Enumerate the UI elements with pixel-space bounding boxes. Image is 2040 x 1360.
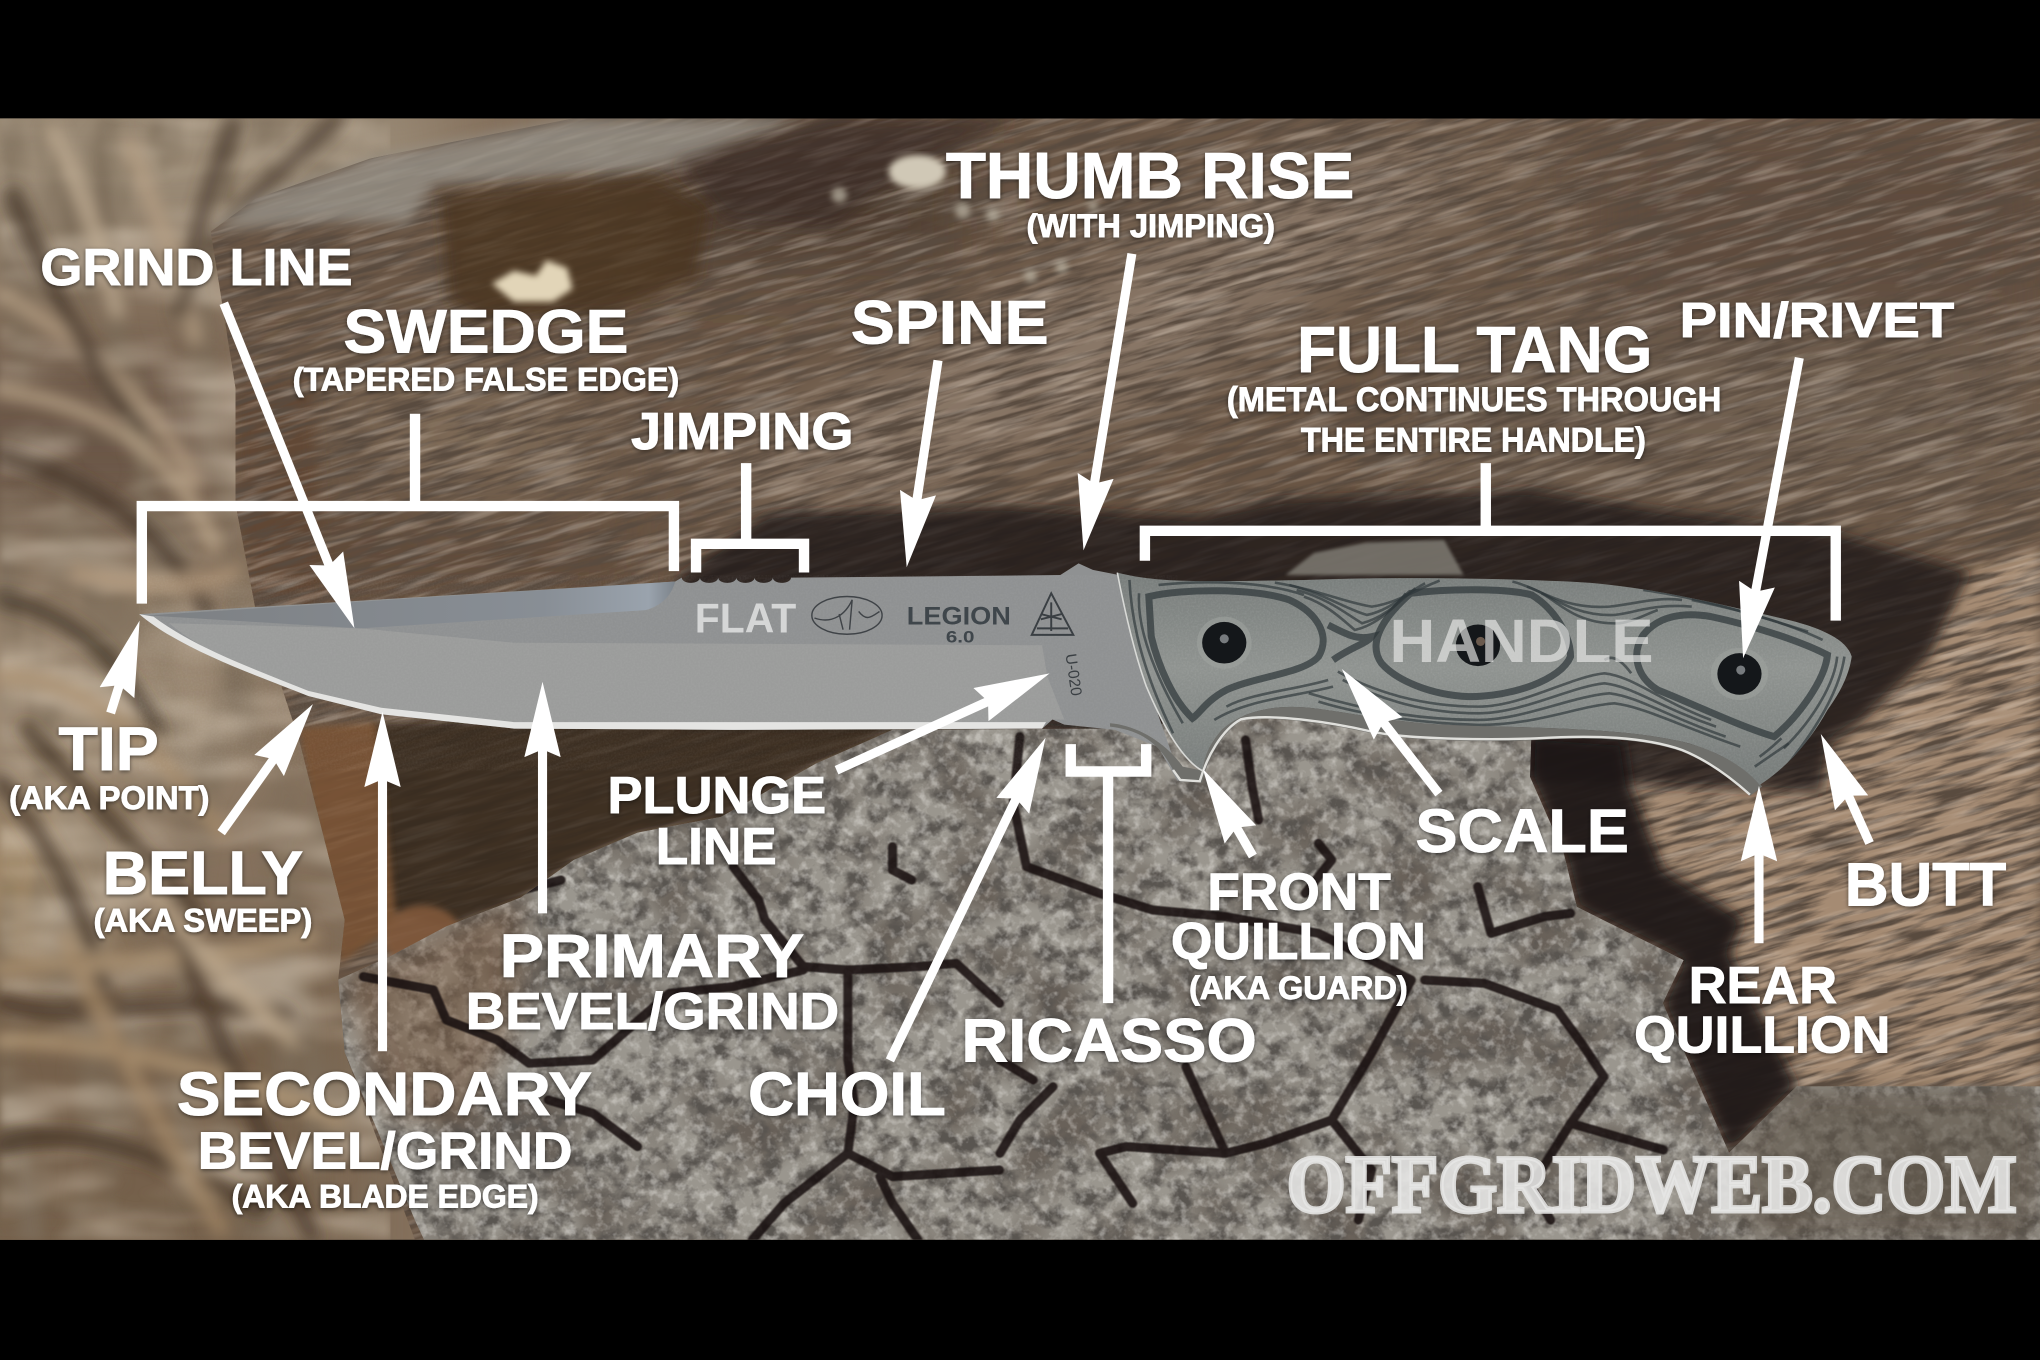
- knife: [139, 563, 1860, 800]
- logo: signature circle: [812, 597, 882, 634]
- label: ricasso: RICASSO: [961, 1007, 1257, 1075]
- label: swedge: [293, 298, 679, 397]
- blade and tang body: [139, 563, 1202, 782]
- wood base tone: [195, 118, 2040, 1240]
- arrow: rear quillion: [1755, 833, 1762, 943]
- brown tint at bark left: [338, 898, 520, 1119]
- label: choil: CHOIL: [748, 1060, 946, 1128]
- bracket: ricasso: [1071, 744, 1146, 1003]
- label: rear quillion: [1634, 957, 1890, 1065]
- knife cast shadow: [677, 490, 1968, 794]
- labels: [9, 139, 2006, 1214]
- straw dark noise: [0, 118, 390, 1240]
- bark light texture: [325, 709, 2040, 1240]
- arrow: belly: [221, 742, 286, 833]
- liner highlight: [1173, 717, 1750, 795]
- bracket: swedge: [142, 414, 674, 604]
- liner band: [1110, 707, 1762, 796]
- text: LEGION model: LEGION: [907, 603, 1011, 630]
- arrow: tip: [111, 665, 126, 713]
- label: full tang: FULL TANG: [1297, 313, 1652, 386]
- label: rear quillion: REAR: [1689, 957, 1837, 1015]
- handle micarta texture: [1112, 566, 1860, 800]
- bark dark texture: [325, 709, 2040, 1240]
- straw strands: [0, 117, 338, 1236]
- bark strip at log top: [211, 118, 807, 232]
- blurred wood colour fields: [247, 130, 2040, 585]
- label: secondary bevel: SECONDARY: [177, 1060, 592, 1128]
- bracket: jimping: [696, 463, 804, 572]
- rivet front: [1197, 617, 1252, 669]
- text: serial number: U-020: [1062, 653, 1084, 697]
- primary bevel: [169, 623, 1064, 726]
- label: front quillion: FRONT: [1207, 863, 1391, 921]
- straw light noise: [0, 118, 390, 1240]
- label: butt: BUTT: [1845, 851, 2006, 919]
- dark wood under blade: [371, 722, 911, 926]
- tan wood lower right: [1624, 546, 2040, 1086]
- label: plunge line: LINE: [656, 818, 777, 876]
- label: plunge line: PLUNGE: [608, 767, 826, 825]
- rust strip at front of log: [299, 722, 397, 963]
- label: swedge: (TAPERED FALSE EDGE): [293, 361, 679, 397]
- blurred dark bark at lower right: [1729, 1086, 2040, 1240]
- label: primary bevel: [466, 922, 839, 1041]
- arrow: choil: [890, 780, 1025, 1060]
- bark base tone: [325, 709, 2040, 1240]
- blurred straw colour fields: [0, 78, 442, 1288]
- wood log: [195, 118, 2040, 1240]
- text: FLAT etching: FLAT: [695, 594, 796, 641]
- arrow: front quillion: [1226, 810, 1253, 856]
- label: jimping: JIMPING: [631, 403, 853, 461]
- scale front edge highlight: [1117, 573, 1202, 771]
- arrow: butt: [1840, 777, 1870, 843]
- rivet centre: [1456, 624, 1500, 666]
- label: primary bevel: BEVEL/GRIND: [466, 983, 839, 1041]
- light streak texture: [195, 118, 2040, 1240]
- label: thumb rise: [946, 139, 1354, 244]
- label: pin/rivet: PIN/RIVET: [1680, 293, 1954, 348]
- label: thumb rise: (WITH JIMPING): [1027, 208, 1275, 244]
- label: belly: BELLY: [103, 839, 303, 907]
- label: secondary bevel: (AKA BLADE EDGE): [232, 1178, 539, 1214]
- label: secondary bevel: [177, 1060, 592, 1214]
- text: HANDLE overlay: HANDLE: [1389, 607, 1654, 675]
- label: front quillion: QUILLION: [1171, 913, 1426, 971]
- blade fine grain: [139, 575, 1177, 770]
- pale wood chip: [492, 260, 572, 302]
- bark large tone variation: [325, 709, 2040, 1240]
- pale wood chip top: [889, 155, 946, 189]
- bark lumps behind handle: [1285, 540, 1464, 575]
- arrow: thumb rise: [1091, 254, 1132, 504]
- label: thumb rise: THUMB RISE: [946, 139, 1354, 212]
- label: full tang: (METAL CONTINUES THROUGH: [1227, 381, 1721, 419]
- orange lump: [384, 906, 462, 968]
- label: grind line: GRIND LINE: [40, 239, 353, 297]
- label: secondary bevel: BEVEL/GRIND: [198, 1122, 572, 1180]
- bracket: full tang: [1145, 463, 1836, 621]
- arrow: scale: [1371, 706, 1439, 794]
- label: belly: [94, 839, 312, 939]
- arrow: plunge line: [837, 693, 1007, 770]
- text: LEGION model: 6.0: [946, 628, 974, 647]
- arrow: spine: [914, 360, 938, 521]
- rivet rear: [1711, 648, 1768, 700]
- pale specks: [831, 187, 1098, 282]
- dark gap at top: [677, 118, 1015, 228]
- arrow: grind line: [224, 303, 337, 585]
- logo: TOPS mountain mark: [1032, 593, 1073, 635]
- secondary bevel edge: [139, 614, 1046, 730]
- label: rear quillion: QUILLION: [1634, 1007, 1890, 1065]
- label: full tang: [1227, 313, 1721, 459]
- label: tip: (AKA POINT): [9, 780, 209, 816]
- left end-grain rust tone: [236, 380, 319, 604]
- handle grain lines: [1129, 580, 1844, 767]
- straw base tone: [0, 118, 729, 1240]
- bark cracks right: [1000, 737, 1663, 1220]
- handle weave noise: [1112, 566, 1860, 800]
- arrow: primary bevel: [539, 729, 546, 913]
- handle liner and highlights: [1110, 707, 1762, 796]
- shadow strip right of bark: [1530, 735, 1797, 1153]
- text: LEGION model: [907, 603, 1011, 647]
- handle scale: [1117, 573, 1852, 785]
- label: tip: TIP: [59, 715, 159, 783]
- label: spine: SPINE: [851, 288, 1049, 356]
- label: front quillion: (AKA GUARD): [1189, 970, 1408, 1006]
- bark cracks left: [363, 847, 1000, 1240]
- label: swedge: SWEDGE: [343, 298, 628, 366]
- swedge bevel: [147, 582, 675, 628]
- arrow: secondary bevel: [379, 758, 386, 1051]
- label: tip: [9, 715, 209, 816]
- label: primary bevel: PRIMARY: [500, 922, 804, 990]
- arrow: pin/rivet: [1752, 358, 1799, 612]
- label: plunge line: [608, 767, 826, 876]
- label: belly: (AKA SWEEP): [94, 903, 312, 939]
- label: front quillion: [1171, 863, 1426, 1006]
- dark wood block at top left: [440, 176, 709, 319]
- label: full tang: THE ENTIRE HANDLE): [1301, 421, 1646, 459]
- rocky bark: [325, 709, 2040, 1240]
- label: scale: SCALE: [1416, 797, 1629, 865]
- dark streak texture: [195, 118, 2040, 1240]
